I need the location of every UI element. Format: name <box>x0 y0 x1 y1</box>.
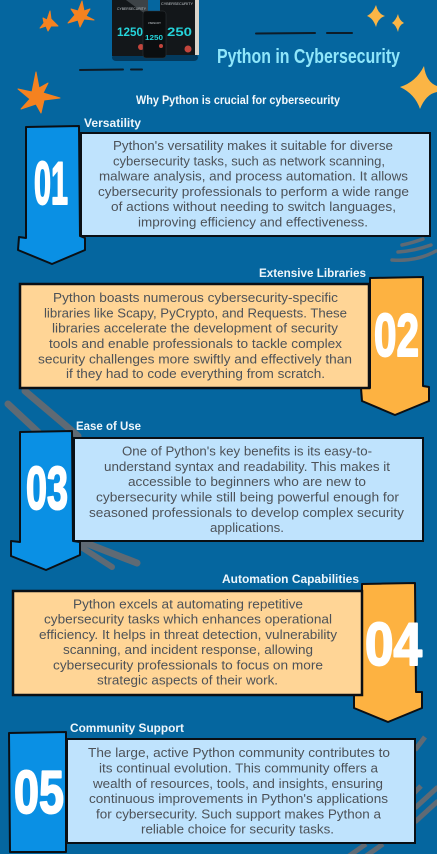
body text: extensive libraries: if they had to code everything from scratch. <box>66 366 325 381</box>
icon: gold sparkle large <box>400 66 437 109</box>
body text: community support: reliable choice for security tasks. <box>141 822 334 836</box>
icon: orange star small <box>40 11 58 31</box>
body text: ease of use: accessible to beginners who are new to <box>128 474 366 489</box>
body text: ease of use <box>89 444 405 535</box>
body text: community support <box>88 745 390 836</box>
body text: ease of use: seasoned professionals to develop complex security <box>89 505 405 520</box>
body text: ease of use: understand syntax and readability. This makes it <box>104 459 390 474</box>
body text: automation capabilities: cybersecurity tasks which enhances operational <box>44 612 332 626</box>
subtitle: Why Python is crucial for cybersecurity <box>136 93 340 107</box>
body text: extensive libraries: Python boasts numerous cybersecurity-specific <box>53 290 339 305</box>
body text: versatility: of actions without needing to switch languages, <box>111 199 396 214</box>
body text: automation capabilities: cybersecurity professionals to focus on more <box>53 658 323 672</box>
body text: extensive libraries <box>38 290 352 381</box>
text box: extensive libraries <box>20 284 369 388</box>
text box: community support <box>67 739 415 843</box>
body text: extensive libraries: libraries accelerate the development of security <box>52 320 339 336</box>
body text: community support: for cybersecurity. Such support makes Python a <box>96 806 382 822</box>
right book: 250 <box>167 25 192 39</box>
number: 04: 04 <box>365 611 423 678</box>
body text: automation capabilities: scanning, and incident response, allowing <box>63 642 313 657</box>
heading: automation capabilities: Automation Capabilities <box>222 574 359 586</box>
right book <box>160 0 199 55</box>
body text: versatility <box>98 138 409 230</box>
panel: automation capabilities <box>13 574 423 722</box>
grey arcs, right <box>392 239 436 260</box>
icon: gold sparkle 2 <box>392 14 404 32</box>
body text: automation capabilities <box>39 596 338 688</box>
panel: versatility <box>18 118 430 264</box>
left book: 1250 <box>117 25 143 39</box>
text box: versatility <box>81 133 430 236</box>
body text: community support: continuous improvements in Python's applications <box>89 791 389 806</box>
icon: orange star large <box>18 72 60 113</box>
body text: versatility: Python's versatility makes it suitable for diverse <box>113 138 393 153</box>
black dashes under books <box>80 68 142 71</box>
black dashes near title <box>256 32 352 34</box>
arrow: 01 <box>18 126 85 264</box>
panel: community support <box>9 723 415 852</box>
heading: community support: Community Support <box>70 723 184 735</box>
panel: ease of use <box>11 421 423 570</box>
phone <box>143 11 166 58</box>
body text: community support: wealth of resources, tools, and insights, ensuring <box>92 776 383 791</box>
heading: ease of use: Ease of Use <box>76 421 141 433</box>
text box: ease of use <box>74 438 423 541</box>
right book: CYBERSECURITY <box>161 2 194 6</box>
left book <box>112 0 148 56</box>
book mockup image <box>112 0 199 61</box>
text box: automation capabilities <box>13 591 362 695</box>
number: 03: 03 <box>26 455 68 522</box>
body text: versatility: improving efficiency and effectiveness. <box>138 214 368 230</box>
heading: extensive libraries: Extensive Libraries <box>259 268 366 280</box>
left book: CYBERSECURITY <box>117 7 147 11</box>
phone: 1250 <box>145 33 163 42</box>
grey diagonal strokes, lower right <box>349 737 437 854</box>
number: 01: 01 <box>34 150 68 217</box>
number: 05: 05 <box>14 759 64 826</box>
arrow: 02 <box>361 277 429 415</box>
grey diagonal strokes, middle left <box>8 391 137 567</box>
arrow: 05 <box>9 732 66 852</box>
body text: versatility: cybersecurity professionals to perform a wide range <box>98 184 409 199</box>
body text: ease of use: One of Python's key benefits is its easy-to- <box>122 444 372 459</box>
panel: extensive libraries <box>20 268 429 415</box>
body text: extensive libraries: tools and enable professionals to tackle complex <box>49 336 343 351</box>
body text: community support: The large, active Python community contributes to <box>88 745 390 760</box>
body text: ease of use: cybersecurity while still being powerful enough for <box>96 490 400 504</box>
body text: ease of use: applications. <box>210 520 284 535</box>
icon: gold sparkle 1 <box>367 5 385 27</box>
body text: community support: its continual evolution. This community offers a <box>99 760 379 776</box>
arrow: 03 <box>11 431 80 570</box>
body text: extensive libraries: libraries like Scapy, PyCrypto, and Requests. These <box>44 306 347 320</box>
body text: versatility: malware analysis, and process automation. It allows <box>99 169 409 184</box>
body text: automation capabilities: Python excels at automating repetitive <box>73 596 303 611</box>
phone: CYBERSECURITY <box>148 21 161 25</box>
body text: extensive libraries: security challenges more swiftly and effectively than <box>38 352 352 366</box>
icon: orange star medium <box>68 1 94 27</box>
body text: versatility: cybersecurity tasks, such as network scanning, <box>113 153 385 168</box>
heading: versatility: Versatility <box>84 118 142 130</box>
body text: automation capabilities: strategic aspects of their work. <box>97 672 278 688</box>
body text: automation capabilities: efficiency. It helps in threat detection, vulnerability <box>39 627 338 642</box>
arrow: 04 <box>354 583 422 722</box>
